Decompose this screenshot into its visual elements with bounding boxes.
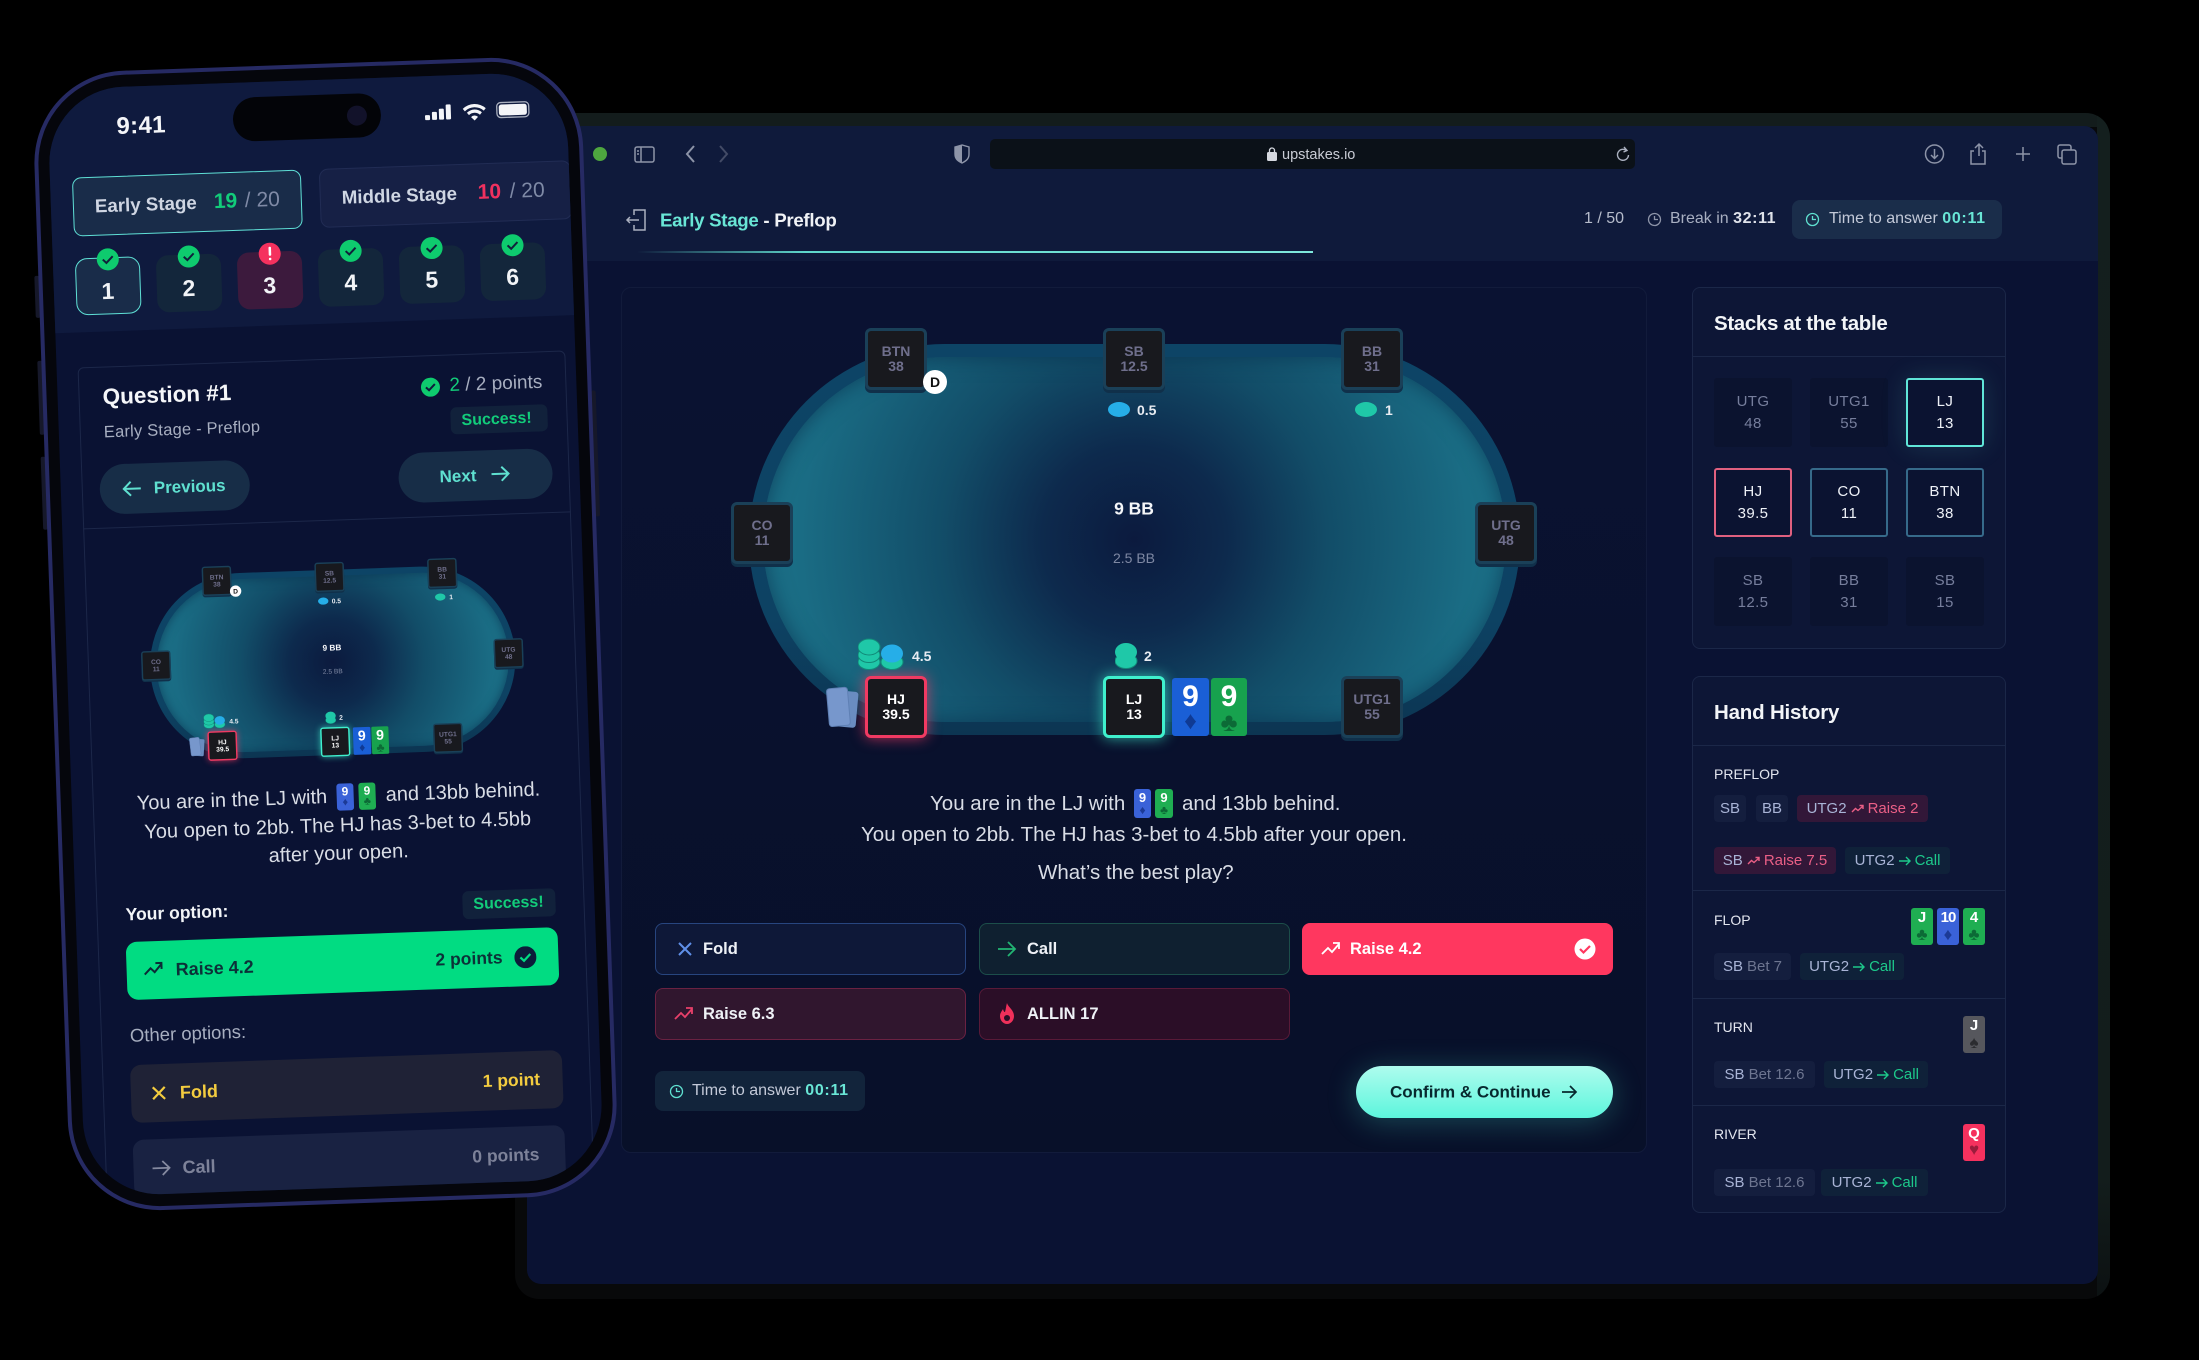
stack cell: UTG1: 55 — [1840, 415, 1858, 432]
stack cell: HJ: 39.5 — [1738, 505, 1768, 522]
chip: BB bet — [1355, 402, 1393, 418]
section: river: Call — [1892, 1174, 1917, 1191]
heading: stacks: Stacks at the table — [1714, 312, 1887, 335]
toolbar: window dot — [593, 147, 607, 161]
mini hole card: nine of diamonds: ♦ — [358, 741, 365, 754]
dealer button — [923, 370, 947, 394]
section: turn: SB — [1725, 1066, 1745, 1083]
stack cell: BB — [1810, 557, 1888, 626]
mini seat: CO: 11 — [152, 665, 159, 673]
mini seat: UTG — [492, 638, 523, 668]
stack cell: SB: SB — [1743, 572, 1763, 589]
stack cell: SB 15 — [1906, 557, 1984, 626]
seat: BB: BB — [1362, 343, 1382, 359]
phone inline card: nine of clubs: ♣ — [363, 796, 371, 808]
mini seat: BB — [426, 558, 456, 588]
seat: BTN: BTN — [882, 343, 910, 359]
chip: BB bet: 1 — [1385, 402, 1393, 418]
question title: Question #1 — [102, 380, 231, 409]
option: ALLIN 17 — [979, 988, 1290, 1040]
stack cell: HJ — [1714, 468, 1792, 537]
stack cell: UTG1 — [1810, 378, 1888, 447]
next button — [397, 448, 553, 503]
question button 3 wrong: 3 — [262, 272, 276, 298]
time to answer pill bottom — [655, 1071, 865, 1111]
mini seat: LJ: 13 — [331, 741, 338, 749]
question subtitle: Early Stage - Preflop — [103, 418, 260, 441]
section: turn: Bet 12.6 — [1749, 1066, 1804, 1083]
stack cell: BB: 31 — [1840, 594, 1858, 611]
toolbar right icons — [1924, 143, 2077, 165]
mini seat: UTG: UTG — [500, 645, 515, 653]
inline card: nine of diamonds: 9 — [1139, 790, 1146, 805]
inline card: nine of clubs: ♣ — [1160, 803, 1168, 817]
success badge: Success! — [461, 410, 532, 429]
seat: BB — [1341, 328, 1403, 390]
section: turn — [1714, 1016, 1985, 1088]
section: flop: Call — [1869, 958, 1895, 975]
mini hole card: nine of diamonds: 9 — [357, 728, 365, 744]
mini chip: SB bet — [318, 597, 341, 605]
mini seat: CO: CO — [150, 658, 160, 666]
option bar: call: 0 points — [471, 1144, 539, 1166]
option: ALLIN 17: ALLIN 17 — [1027, 1005, 1099, 1023]
board card: queen of hearts: Q — [1968, 1125, 1980, 1142]
dynamic island — [232, 93, 381, 142]
success badge lower: Success! — [473, 894, 543, 913]
folded cards: HJ — [826, 686, 858, 728]
mini seat: BTN — [201, 566, 231, 596]
section: turn: TURN — [1714, 1019, 1753, 1035]
board card: queen of hearts: ♥ — [1969, 1140, 1979, 1159]
phone screen — [46, 71, 604, 1197]
icon: sidebar — [634, 146, 655, 163]
scenario text: What’s the best play? — [1038, 861, 1234, 884]
stack cell: CO: CO — [1837, 483, 1861, 500]
stack cell: LJ — [1906, 378, 1984, 447]
panel: hand history — [1692, 676, 2006, 1213]
board card: jack of clubs: J — [1918, 909, 1926, 926]
icon: dark check — [514, 946, 536, 968]
phone scenario text: You are in the LJ with — [136, 786, 327, 815]
section: preflop: BB — [1762, 800, 1782, 817]
mini seat: HJ: 39.5 — [215, 745, 228, 753]
icon: reload — [1616, 146, 1630, 161]
hole card: nine of clubs — [1211, 678, 1247, 736]
stack cell: UTG: UTG — [1737, 393, 1769, 410]
option bar: fold: Fold — [179, 1081, 218, 1102]
scenario text: and 13bb behind. — [1182, 792, 1340, 815]
question button 1 — [74, 256, 141, 315]
previous button: Previous — [153, 476, 225, 497]
mini seat: HJ: HJ — [217, 738, 226, 746]
seat: CO: 11 — [755, 532, 769, 548]
status icons: signal wifi battery — [425, 101, 530, 120]
section: preflop: UTG2 — [1807, 800, 1847, 817]
next button: Next — [439, 466, 476, 486]
panel: quiz main — [621, 287, 1647, 1153]
panel: question card outline — [77, 350, 595, 1227]
seat: UTG — [1475, 502, 1537, 564]
status bar time: 9:41 — [116, 111, 166, 140]
mini chips: HJ bet: 4.5 — [228, 717, 238, 725]
stack cell: SB 15: SB — [1935, 572, 1955, 589]
section: flop — [1714, 908, 1985, 980]
time to answer pill — [1792, 200, 2002, 239]
tab: early stage: Early Stage — [94, 192, 197, 216]
section: turn: Call — [1893, 1066, 1919, 1083]
option: Raise 4.2 selected: Raise 4.2 — [1350, 940, 1422, 958]
board card: jack of spades: J — [1970, 1017, 1978, 1034]
seat: LJ — [1103, 676, 1165, 738]
badge: correct — [96, 248, 119, 270]
mini hole card: nine of diamonds — [352, 727, 370, 755]
hole card: nine of diamonds: ♦ — [1184, 707, 1197, 735]
seat: HJ: 39.5 — [882, 706, 910, 722]
mini seat: SB: 12.5 — [322, 576, 335, 584]
inline card: nine of diamonds — [1134, 789, 1151, 818]
scenario text: You are in the LJ with — [930, 792, 1125, 815]
section: preflop: Call — [1915, 852, 1940, 869]
option: Raise 6.3 — [655, 988, 966, 1040]
mini seat: SB — [313, 562, 344, 592]
section: flop: FLOP — [1714, 912, 1751, 928]
mini chips: LJ bet: 2 — [338, 714, 342, 721]
seat: UTG1 — [1341, 676, 1403, 738]
phone inline card: nine of diamonds — [336, 783, 354, 811]
selected option bar: 2 points — [435, 947, 502, 970]
other options label: Other options: — [129, 1021, 246, 1046]
section: preflop: SB — [1720, 800, 1740, 817]
address bar — [990, 139, 1635, 169]
stack cell: BB: BB — [1839, 572, 1859, 589]
seat: CO: CO — [752, 517, 772, 533]
question button 4 — [317, 248, 384, 307]
blinds label: 2.5 BB — [1113, 550, 1155, 566]
points earned: 2 / 2 points — [449, 372, 542, 396]
time to answer pill bottom: Time to answer 00:11 — [692, 1082, 849, 1099]
option: Raise 4.2 selected — [1302, 923, 1613, 975]
mini hole card: nine of clubs: 9 — [375, 727, 383, 743]
question button 6: 6 — [505, 264, 519, 290]
chips: LJ bet: 2 — [1144, 648, 1152, 664]
phone inline card: nine of diamonds: ♦ — [342, 796, 348, 809]
heading: hand history: Hand History — [1714, 701, 1839, 724]
mini folded cards — [189, 737, 204, 756]
confirm button — [1356, 1066, 1613, 1118]
inline card: nine of diamonds: ♦ — [1139, 803, 1146, 817]
section: preflop: Raise 7.5 — [1764, 852, 1827, 869]
phone inline card: nine of clubs: 9 — [363, 784, 370, 798]
your option label: Your option: — [125, 901, 228, 924]
stack cell: SB: 12.5 — [1738, 594, 1768, 611]
board card: jack of spades — [1963, 1016, 1985, 1053]
board card: four of clubs — [1963, 908, 1985, 945]
chips: HJ bet: 4.5 — [912, 648, 931, 664]
browser screen — [527, 126, 2098, 1284]
mini chip: BB bet: 1 — [448, 593, 452, 601]
stack cell: UTG1: UTG1 — [1828, 393, 1870, 410]
mini chips: LJ bet — [325, 712, 343, 724]
phone mockup — [34, 58, 616, 1210]
section: flop: SB — [1723, 958, 1743, 975]
desktop browser window — [515, 113, 2110, 1299]
mini seat: BTN: BTN — [209, 573, 223, 581]
time to answer pill: Time to answer 00:11 — [1829, 210, 1986, 227]
mini pot label: 9 BB — [321, 643, 341, 653]
break timer: Break in 32:11 — [1670, 210, 1776, 227]
phone scenario text — [136, 779, 540, 867]
tab: middle stage: Middle Stage — [341, 183, 457, 208]
question counter: 1 / 50 — [1584, 210, 1624, 227]
board card: jack of clubs: ♣ — [1916, 925, 1928, 944]
tab: middle stage: 10 — [477, 180, 501, 204]
section: preflop: Raise 2 — [1868, 800, 1918, 817]
mini seat: BB: 31 — [438, 572, 445, 580]
mini hole card: nine of clubs: ♣ — [375, 740, 384, 754]
question button 3 wrong — [236, 251, 303, 310]
seat: UTG1: 55 — [1364, 706, 1380, 722]
panel: stacks at the table — [1692, 287, 2006, 649]
mini seat: BB: BB — [436, 565, 446, 573]
seat: HJ — [865, 676, 927, 738]
board card: ten of diamonds — [1937, 908, 1959, 945]
stack cell: BTN — [1906, 468, 1984, 537]
mini chips: HJ bet — [204, 714, 238, 728]
poker table — [731, 328, 1537, 749]
option bar: fold: 1 point — [482, 1069, 540, 1091]
icon: back and forward chevrons — [686, 146, 728, 162]
stack cell: LJ: LJ — [1937, 393, 1953, 410]
mini poker table — [141, 558, 524, 766]
stack cell: BTN: 38 — [1936, 505, 1954, 522]
phone side buttons — [34, 276, 40, 318]
option: Call: Call — [1027, 940, 1057, 958]
question button 5: 5 — [424, 266, 438, 293]
section: preflop: PREFLOP — [1714, 766, 1779, 782]
question button 2 — [155, 253, 222, 313]
tab: early stage: 19 — [213, 189, 237, 213]
tab: early stage: / 20 — [244, 188, 280, 212]
board card: queen of hearts — [1963, 1124, 1985, 1161]
section: river: UTG2 — [1832, 1174, 1872, 1191]
seat: LJ: 13 — [1126, 706, 1142, 722]
phone header background — [31, 55, 589, 334]
phone inline card: nine of diamonds: 9 — [341, 784, 348, 799]
phone scenario text: after your open. — [268, 840, 409, 867]
board card: jack of spades: ♠ — [1969, 1033, 1979, 1052]
tab: early stage — [71, 170, 302, 237]
phone scenario text: You open to 2bb. The HJ has 3-bet to 4.5bb — [143, 808, 531, 843]
board card: four of clubs: ♣ — [1968, 925, 1980, 944]
section: preflop — [1714, 766, 1950, 874]
stack cell: UTG: 48 — [1744, 415, 1762, 432]
seat: HJ: HJ — [887, 691, 905, 707]
icon: lock — [1267, 147, 1277, 161]
scenario text — [861, 789, 1407, 884]
browser toolbar and page header — [527, 126, 2098, 261]
board card: ten of diamonds: ♦ — [1944, 925, 1952, 944]
question button 4: 4 — [343, 269, 357, 296]
icon: selected check — [1574, 938, 1596, 960]
icon: shield — [954, 144, 970, 164]
stack cell: SB — [1714, 557, 1792, 626]
page title: Early Stage - Preflop — [660, 209, 836, 230]
question button 1: 1 — [101, 278, 114, 304]
mini seat: BTN: 38 — [212, 580, 220, 588]
mini seat: LJ: LJ — [330, 734, 338, 742]
mini hole card: nine of clubs — [370, 726, 388, 754]
seat: LJ: LJ — [1126, 691, 1142, 707]
chips: HJ bet — [858, 638, 931, 670]
question button 2: 2 — [181, 275, 195, 301]
success badge lower — [462, 888, 555, 919]
phone inline card: nine of clubs — [358, 782, 376, 810]
section: preflop: SB — [1723, 852, 1743, 869]
mini seat: UTG1: 55 — [443, 737, 451, 745]
seat: UTG: UTG — [1491, 517, 1521, 533]
scenario text: You open to 2bb. The HJ has 3-bet to 4.5bb after your open. — [861, 823, 1407, 846]
hole card: nine of clubs: 9 — [1221, 680, 1237, 713]
board card: ten of diamonds: 10 — [1941, 909, 1955, 926]
option bar: call — [132, 1125, 566, 1198]
section: river: Bet 12.6 — [1749, 1174, 1804, 1191]
option bar: fold — [129, 1050, 563, 1123]
section: river — [1714, 1124, 1985, 1196]
hole card: nine of diamonds: 9 — [1182, 680, 1199, 713]
stack cell: SB 15: 15 — [1936, 594, 1954, 611]
seat: UTG1: UTG1 — [1353, 691, 1391, 707]
section: river: SB — [1725, 1174, 1745, 1191]
mini chip: BB bet — [435, 593, 453, 601]
mini seat: HJ — [206, 731, 237, 761]
seat: BB: 31 — [1364, 358, 1380, 374]
progress line — [637, 251, 1313, 253]
seat: BTN — [865, 328, 927, 390]
confirm button: Confirm & Continue — [1390, 1082, 1551, 1102]
icon: exit stage — [626, 209, 646, 231]
option: Fold: Fold — [703, 940, 738, 958]
mini blinds label: 2.5 BB — [322, 667, 342, 675]
stack cell: BTN: BTN — [1929, 483, 1961, 500]
chips: LJ bet — [1115, 643, 1152, 669]
option: Call — [979, 923, 1290, 975]
tab: middle stage: / 20 — [509, 179, 545, 203]
pot label: 9 BB — [1114, 498, 1154, 518]
success badge — [450, 404, 548, 434]
mini seat: UTG: 48 — [504, 653, 512, 660]
board card: jack of clubs — [1911, 908, 1933, 945]
stack cell: HJ: HJ — [1743, 483, 1763, 500]
seat: SB — [1103, 328, 1165, 390]
section: flop: Bet 7 — [1747, 958, 1782, 975]
question button 6 — [479, 242, 546, 301]
mini seat: SB: SB — [324, 569, 333, 577]
mini seat: UTG1: UTG1 — [438, 730, 456, 738]
stack cell: CO — [1810, 468, 1888, 537]
stack cell: LJ: 13 — [1936, 415, 1954, 432]
seat: BTN: 38 — [888, 358, 904, 374]
section: turn: UTG2 — [1833, 1066, 1873, 1083]
option: Fold — [655, 923, 966, 975]
seat: UTG: 48 — [1498, 532, 1514, 548]
section: river: RIVER — [1714, 1126, 1757, 1142]
inline card: nine of clubs: 9 — [1160, 790, 1168, 805]
mini seat: LJ — [319, 727, 349, 757]
seat: SB: SB — [1124, 343, 1144, 359]
tab: middle stage — [318, 160, 572, 228]
address bar: upstakes.io — [1282, 146, 1355, 162]
selected option bar: Raise 4.2 — [175, 957, 253, 979]
selected option bar — [125, 927, 559, 1000]
mini chip: SB bet: 0.5 — [331, 597, 340, 605]
hole card: nine of diamonds — [1172, 678, 1209, 736]
section: flop: UTG2 — [1809, 958, 1849, 975]
chip: SB bet: 0.5 — [1137, 402, 1156, 418]
stack cell: UTG — [1714, 378, 1792, 447]
previous button — [98, 460, 250, 515]
phone scenario text: and 13bb behind. — [385, 779, 540, 806]
inline card: nine of clubs — [1155, 789, 1173, 818]
section: preflop: UTG2 — [1855, 852, 1895, 869]
board card: four of clubs: 4 — [1970, 909, 1978, 926]
mini seat: CO — [140, 650, 170, 681]
mini dealer button — [229, 585, 240, 597]
mini seat: UTG1 — [432, 723, 462, 753]
chip: SB bet — [1108, 402, 1156, 418]
question button 5 — [398, 245, 465, 304]
option: Raise 6.3: Raise 6.3 — [703, 1005, 775, 1023]
mini dealer button: D — [232, 587, 237, 595]
option bar: call: Call — [182, 1156, 215, 1177]
dealer button: D — [930, 374, 940, 390]
seat: CO — [731, 502, 793, 564]
seat: SB: 12.5 — [1120, 358, 1148, 374]
stack cell: CO: 11 — [1841, 505, 1857, 522]
